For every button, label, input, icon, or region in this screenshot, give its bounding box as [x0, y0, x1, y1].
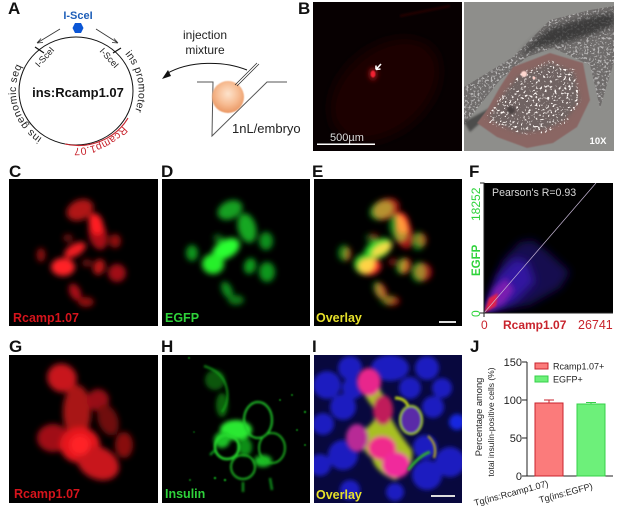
panel B: fluorescence image: 500µm — [330, 132, 364, 144]
axes — [480, 183, 613, 317]
promoter label: ins promoter — [126, 50, 145, 113]
y title: Percentage among — [474, 378, 484, 456]
panel B: brightfield image — [464, 2, 614, 151]
panel B: fluorescence image — [311, 2, 462, 162]
embryo body band — [464, 6, 614, 125]
genomic label: ins genomic seq — [8, 64, 42, 144]
well trough — [197, 82, 287, 136]
Rcamp label: Rcamp1.07 — [74, 126, 128, 156]
axes — [522, 362, 613, 476]
label E: E — [312, 162, 323, 181]
bar EGFP — [577, 404, 605, 476]
arrow right — [96, 29, 118, 43]
arrow head — [162, 70, 171, 79]
legend EGFP — [535, 376, 548, 382]
legend EGFP text: EGFP+ — [553, 374, 583, 384]
red Rcamp segment — [65, 118, 128, 145]
panel A: plasmid diagram — [8, 0, 145, 156]
dose label: 1nL/embryo — [232, 121, 301, 136]
x label 2: Tg(ins:EGFP) — [538, 481, 594, 505]
legend Rcamp — [535, 363, 548, 369]
plasmid circle — [19, 37, 133, 145]
label D: D — [161, 162, 173, 181]
icon: hexagon enzyme — [72, 23, 84, 33]
egg — [212, 81, 244, 113]
label H: H — [161, 337, 173, 356]
scale bar — [431, 495, 455, 497]
label I: I — [312, 337, 317, 356]
injection schematic — [162, 28, 301, 136]
panel H: insulin image — [162, 355, 310, 503]
error bars — [544, 400, 554, 403]
needle — [235, 63, 259, 86]
panel B: brightfield image: 10X — [590, 136, 607, 147]
scale bar — [439, 321, 456, 323]
yolk — [477, 53, 590, 148]
panel E: overlay image — [314, 179, 462, 326]
y axis zero: 0 — [469, 310, 483, 317]
injection text: injection — [183, 28, 227, 42]
panel J: bar chart — [473, 357, 613, 508]
caption: Overlay — [316, 488, 362, 502]
plasmid name: ins:Rcamp1.07 — [32, 85, 124, 100]
label C: C — [9, 162, 21, 181]
label F: F — [469, 162, 479, 181]
label G: G — [9, 337, 22, 356]
caption: Overlay — [316, 311, 362, 325]
cut sites — [35, 47, 121, 53]
caption: EGFP — [165, 311, 199, 325]
caption: Rcamp1.07 — [14, 487, 80, 501]
y ticks: 100 — [504, 395, 522, 407]
bar Rcamp1.07 — [535, 403, 563, 476]
y title second line: total insulin-positive cells (%) — [486, 367, 496, 477]
left site label: I-SceI — [33, 45, 56, 69]
I-SceI enzyme label: I-SceI — [63, 10, 93, 22]
caption: Insulin — [165, 487, 205, 501]
right site label: I-SceI — [98, 46, 121, 70]
x axis max: 26741 — [578, 318, 613, 332]
x axis title: Rcamp1.07 — [503, 318, 567, 332]
curved arrow — [166, 63, 247, 74]
Pearson label: Pearson's R=0.93 — [492, 187, 576, 199]
y ticks — [504, 357, 522, 483]
arrow left — [37, 29, 60, 43]
x label 1: Tg(ins:Rcamp1.07) — [473, 478, 549, 508]
legend Rcamp text: Rcamp1.07+ — [553, 362, 604, 372]
panel G: Rcamp image — [9, 355, 158, 503]
y axis max: 18252 — [469, 187, 483, 221]
y ticks: 0 — [516, 471, 522, 483]
y ticks: 150 — [504, 357, 522, 369]
x axis zero: 0 — [481, 318, 488, 332]
caption: Rcamp1.07 — [13, 311, 79, 325]
label J: J — [470, 337, 479, 356]
y axis title: EGFP — [471, 244, 483, 276]
panel C: Rcamp image — [9, 179, 158, 326]
mixture text: mixture — [185, 43, 225, 57]
panel I: overlay image — [309, 355, 465, 503]
y ticks: 50 — [510, 433, 522, 445]
panel D: EGFP image — [162, 179, 310, 326]
panel F: correlation scatter — [469, 183, 613, 332]
